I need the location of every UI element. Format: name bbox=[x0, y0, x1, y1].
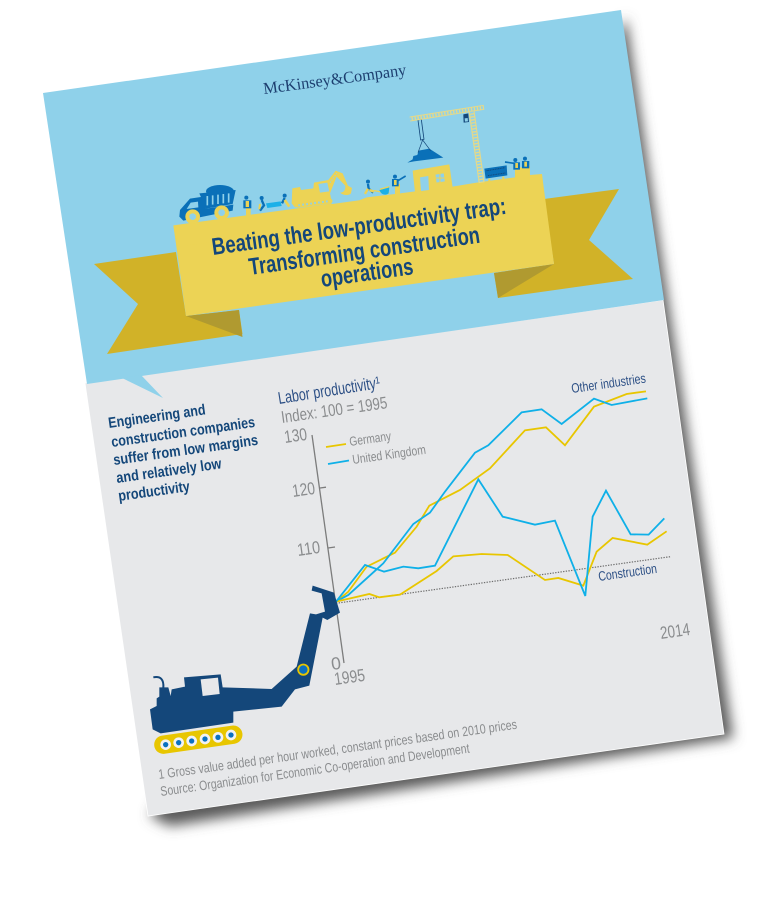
banner ribbon bbox=[94, 175, 633, 354]
line: UK other industries bbox=[336, 398, 647, 602]
panel: gray body bbox=[85, 300, 724, 816]
icon: worker standing bbox=[243, 196, 251, 208]
icon: house bbox=[413, 164, 453, 192]
icon: dump truck bbox=[179, 185, 236, 224]
icon: workers carrying load bbox=[259, 194, 289, 211]
icon: excavator bbox=[292, 171, 352, 207]
axis labels: 110 bbox=[296, 537, 322, 560]
speech tail bbox=[122, 375, 163, 398]
crawler tracks bbox=[160, 730, 236, 750]
label: construction: Construction bbox=[597, 561, 658, 584]
icon: worker pointing bbox=[392, 175, 406, 186]
ground silhouette with hole bbox=[173, 166, 545, 247]
text block: intro: and relatively low bbox=[115, 455, 223, 487]
icon: worker with wheelbarrow bbox=[365, 180, 389, 195]
legend: United Kingdom bbox=[351, 442, 427, 467]
text block: intro: Engineering and bbox=[107, 401, 207, 432]
left ribbon fold bbox=[186, 310, 242, 337]
line: UK construction bbox=[336, 479, 664, 602]
construction scene illustration bbox=[173, 107, 545, 247]
line chart bbox=[336, 391, 671, 603]
axis labels: 1995 bbox=[333, 665, 366, 689]
title bbox=[210, 193, 508, 293]
logo: McKinsey&Company: McKinsey&Company bbox=[262, 60, 408, 98]
exhaust pipe bbox=[153, 677, 163, 688]
arm joint bbox=[298, 664, 308, 675]
text block: intro: productivity bbox=[117, 478, 191, 505]
baseline dotted bbox=[336, 557, 671, 603]
right ribbon fold bbox=[494, 264, 554, 298]
legend: Germany bbox=[348, 428, 392, 449]
axis labels: 120 bbox=[291, 478, 317, 501]
icon: two workers bbox=[505, 157, 529, 170]
line: Germany other industries bbox=[336, 391, 646, 602]
icon: blueprint sign bbox=[484, 165, 507, 182]
legend bbox=[326, 428, 427, 467]
text block: intro: construction companies bbox=[110, 414, 256, 451]
axis labels: 0 bbox=[330, 653, 342, 674]
title: Transforming construction bbox=[247, 222, 482, 281]
cab window bbox=[201, 678, 220, 696]
text block: intro bbox=[107, 401, 259, 505]
label: other industries: Other industries bbox=[570, 371, 647, 396]
page bbox=[43, 10, 724, 816]
right ribbon tail bbox=[494, 189, 633, 298]
icon: crane bbox=[410, 107, 484, 183]
left ribbon tail bbox=[94, 252, 242, 354]
icon: roof hanging from crane bbox=[407, 119, 443, 163]
chart subheading: index: Index: 100 = 1995 bbox=[280, 393, 389, 427]
axis labels: 2014 bbox=[659, 619, 691, 643]
chart heading: labor productivity: Labor productivity¹ bbox=[277, 373, 382, 408]
excavator machine bbox=[150, 586, 340, 750]
title: Beating the low-productivity trap: bbox=[210, 193, 508, 261]
axis labels: 130 bbox=[283, 424, 309, 447]
footnotes: 1 Gross value added per hour worked, constant prices based on 2010 prices bbox=[157, 717, 518, 782]
footnotes: Source: Organization for Economic Co-operation and Development bbox=[159, 741, 471, 799]
chart axis bbox=[312, 435, 344, 663]
line: Germany construction bbox=[336, 531, 667, 602]
text block: intro: suffer from low margins bbox=[112, 432, 259, 469]
machine body and arm bbox=[150, 586, 340, 733]
page shadow bbox=[150, 18, 733, 826]
axis labels bbox=[283, 424, 691, 689]
banner face bbox=[174, 175, 554, 316]
panel: blue header bbox=[43, 10, 664, 384]
title: operations bbox=[319, 253, 415, 293]
